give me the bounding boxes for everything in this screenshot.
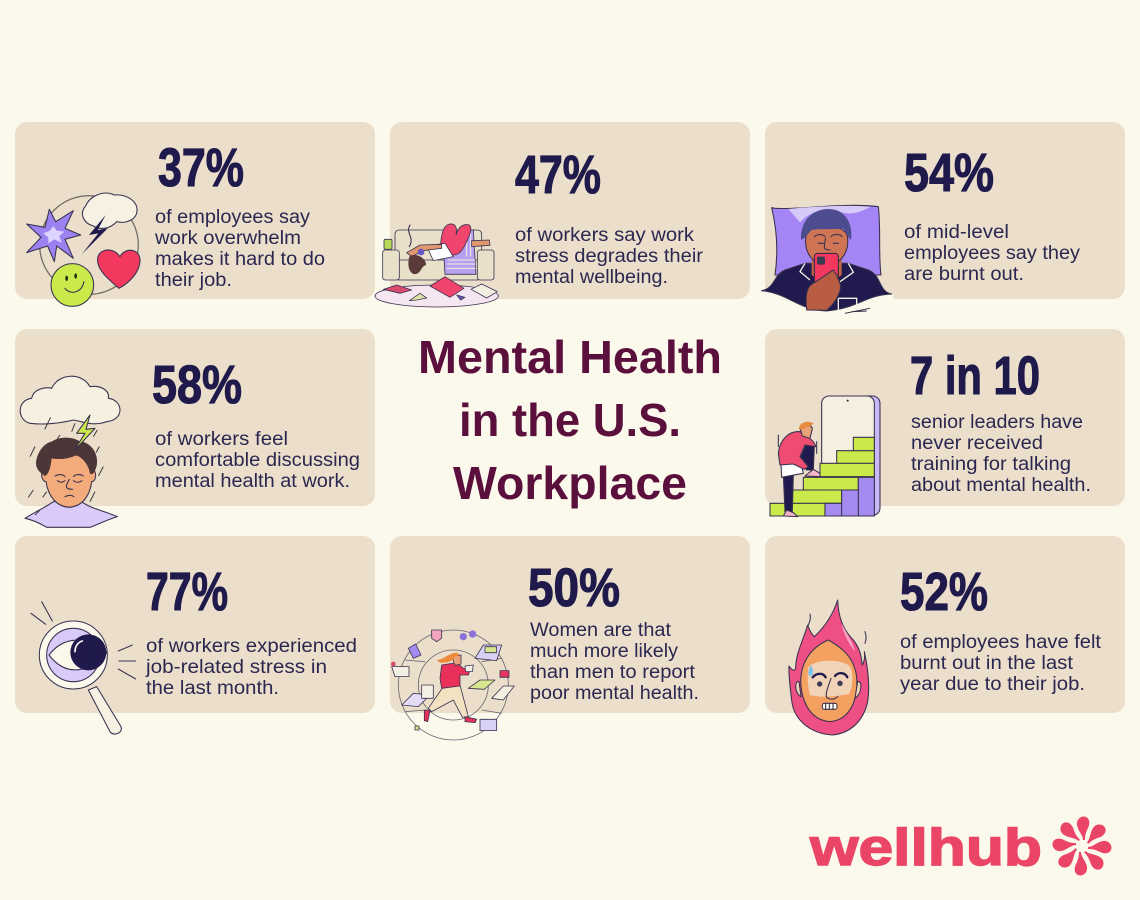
- text: 47% description: mental wellbeing.: [515, 267, 668, 288]
- title: Workplace: [453, 457, 687, 509]
- panel: 7 in 10 senior leaders: [765, 329, 1125, 517]
- panel: 58% comfortable discussing: [15, 329, 375, 527]
- icon: man with phone in bed: [760, 205, 893, 315]
- panel: 50% women: [390, 536, 750, 740]
- title: Mental Health: [418, 331, 722, 383]
- text: 47% description: of workers say work: [515, 225, 695, 246]
- text: 58% description: mental health at work.: [155, 471, 350, 492]
- text: 37% description: of employees say: [155, 207, 311, 228]
- text: 54% description: employees say they: [904, 243, 1081, 264]
- text: 58% description: comfortable discussing: [155, 450, 360, 471]
- text: 77% description: of workers experienced: [146, 636, 357, 657]
- text: 7 in 10 description: senior leaders have: [911, 412, 1083, 433]
- text: 7 in 10 description: training for talking: [911, 454, 1071, 475]
- icon: woman on sofa: [375, 224, 498, 307]
- icon: eye in magnifying glass: [31, 602, 136, 734]
- text: 54% description: of mid-level: [904, 222, 1009, 243]
- text: 52% description: year due to their job.: [900, 674, 1085, 695]
- icon: woman running through orbiting tasks: [391, 630, 514, 740]
- panel: 54% burnt out: [760, 122, 1125, 315]
- stat: 58%: 58%: [152, 355, 242, 415]
- text: 52% description: [900, 632, 1102, 695]
- icon: person tying shoe on phone stairs: [770, 396, 880, 517]
- text: 52% description: of employees have felt: [900, 632, 1102, 653]
- text: 37% description: makes it hard to do: [155, 249, 325, 270]
- stat: 52%: 52%: [900, 562, 988, 622]
- title: in the U.S.: [459, 394, 681, 446]
- stat: 77%: 77%: [146, 562, 228, 622]
- text: 50% description: poor mental health.: [530, 683, 699, 704]
- stat: 54%: 54%: [904, 143, 994, 203]
- text: 77% description: the last month.: [146, 678, 279, 699]
- icon: emotions circle: [27, 193, 140, 306]
- text: 50% description: much more likely: [530, 641, 679, 662]
- text: 54% description: are burnt out.: [904, 264, 1024, 285]
- text: 47% description: [515, 225, 704, 288]
- stat: 7 in 10: 7 in 10: [910, 346, 1040, 406]
- text: 7 in 10 description: [911, 412, 1091, 496]
- text: 58% description: of workers feel: [155, 429, 288, 450]
- panel: 77% job-related stress: [15, 536, 375, 734]
- text: 52% description: burnt out in the last: [900, 653, 1074, 674]
- panel: 47% work stress: [375, 122, 750, 307]
- text: 37% description: their job.: [155, 270, 232, 291]
- text: 47% description: stress degrades their: [515, 246, 704, 267]
- text: 77% description: job-related stress in: [145, 657, 327, 678]
- text: 50% description: [530, 620, 699, 704]
- text: 50% description: Women are that: [530, 620, 672, 641]
- panel: 37% overwhelm: [15, 122, 375, 306]
- text: 58% description: [155, 429, 360, 492]
- text: 50% description: than men to report: [530, 662, 696, 683]
- icon: wellhub swirl flower: [1052, 816, 1112, 876]
- logo: wellhub: [809, 816, 1112, 877]
- panel: 52% burnt out last year: [765, 536, 1125, 735]
- icon: man under storm cloud: [20, 376, 120, 527]
- stat: 47%: 47%: [515, 145, 601, 205]
- text: 7 in 10 description: about mental health.: [911, 475, 1091, 496]
- text: 77% description: [145, 636, 357, 699]
- text: 37% description: [154, 207, 325, 291]
- text: 37% description: work overwhelm: [154, 228, 301, 249]
- stat: 37%: 37%: [158, 138, 244, 198]
- icon: man's head on fire: [789, 600, 869, 735]
- logo wordmark: wellhub: [809, 819, 1042, 877]
- text: 7 in 10 description: never received: [911, 433, 1043, 454]
- stat: 50%: 50%: [528, 558, 620, 618]
- text: 54% description: [904, 222, 1081, 285]
- title: [418, 331, 722, 509]
